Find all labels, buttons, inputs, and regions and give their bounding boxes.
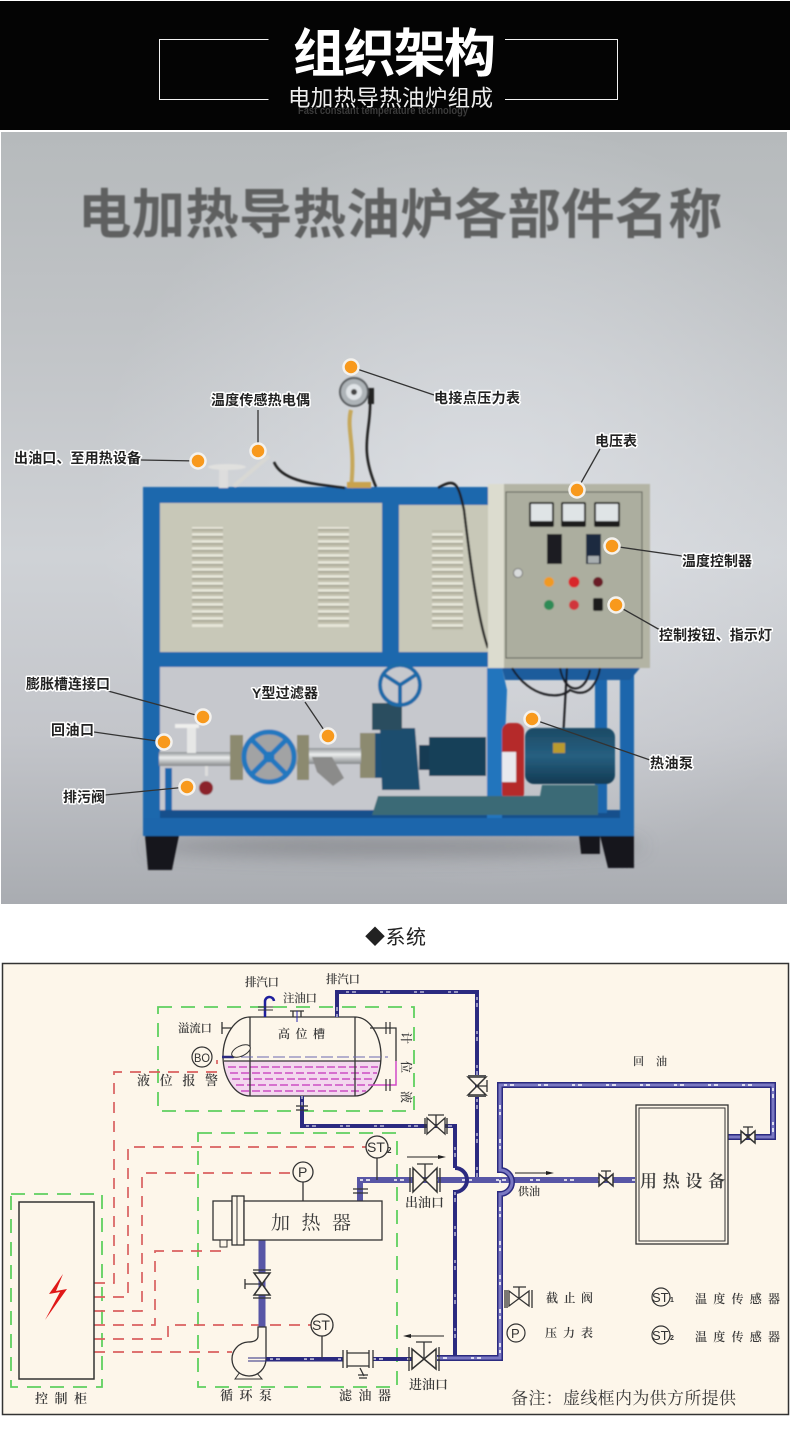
pipe: vent line xyxy=(337,992,477,1180)
callout: outlet: 出油口、至用热设备 xyxy=(14,450,141,466)
callout: oil return: 回油口 xyxy=(51,722,94,738)
circulation pump xyxy=(220,1327,343,1403)
filler port xyxy=(290,1011,304,1017)
subtitle: 电加热导热油炉组成 xyxy=(288,86,493,111)
level gauge label: 液 xyxy=(399,1091,414,1103)
callout: oil pump xyxy=(524,712,693,771)
panel: machine photo xyxy=(1,132,787,904)
level gauge xyxy=(370,1028,396,1061)
header frame lines xyxy=(160,40,618,100)
callout: voltmeter: 电压表 xyxy=(595,433,637,449)
outlet flange xyxy=(208,464,246,488)
heat-using equipment xyxy=(636,1105,728,1244)
valve: gas line xyxy=(468,1076,487,1096)
header band xyxy=(0,1,790,130)
overflow port xyxy=(222,1022,232,1034)
legend xyxy=(505,1287,780,1344)
control cabinet xyxy=(488,484,650,668)
faint English subtitle: Fast constant temperature technology xyxy=(298,105,469,117)
callout: temperature controller xyxy=(604,538,752,569)
alarm label: 液位报警 xyxy=(137,1073,218,1088)
drain valve xyxy=(199,781,213,795)
legend: pressure gauge xyxy=(507,1324,593,1342)
legend: ST1: ST xyxy=(652,1290,669,1305)
pressure gauge P: P xyxy=(298,1164,307,1180)
legend: ST1: 1 xyxy=(670,1297,674,1304)
legend: pressure gauge: P xyxy=(511,1326,520,1341)
temperature sensor ST1: ST xyxy=(312,1317,330,1333)
dashed boundary: heater group xyxy=(198,1133,397,1387)
label: supply oil: 供油 xyxy=(518,1184,540,1198)
valve: tank drain xyxy=(425,1115,447,1134)
header tank: 排汽口 xyxy=(326,972,360,986)
temperature sensor ST2: ST xyxy=(367,1139,385,1155)
callout: drain valve xyxy=(63,780,194,805)
equipment label: 用热设备 xyxy=(640,1172,725,1191)
boiler machine xyxy=(143,378,650,870)
note: 备注：虚线框内为供方所提供 xyxy=(511,1388,737,1408)
pump label: 循环泵 xyxy=(220,1388,272,1403)
callout: thermocouple xyxy=(211,392,310,458)
side panels xyxy=(160,503,382,652)
motor xyxy=(525,728,615,784)
level alarm xyxy=(192,1047,212,1067)
pump handwheel xyxy=(380,665,420,705)
red signal lines xyxy=(94,1060,366,1352)
pipe: return bypass with hop xyxy=(455,1168,467,1358)
pipe: tank drain xyxy=(296,1096,455,1168)
valve: return xyxy=(741,1127,755,1143)
callout: drain valve: 排污阀 xyxy=(63,789,105,805)
tank label: 高位槽 xyxy=(278,1026,325,1041)
header tank: 排汽口 xyxy=(245,975,279,989)
pump base xyxy=(372,785,598,815)
oil filter xyxy=(339,1350,391,1403)
legend: ST1 xyxy=(652,1288,780,1306)
callout: oil pump: 热油泵 xyxy=(650,755,693,771)
legend: pressure gauge: 压力表 xyxy=(545,1325,593,1340)
level gauge label xyxy=(399,1032,414,1103)
callout: voltmeter xyxy=(570,433,637,498)
level gauge label: 计 xyxy=(399,1032,414,1044)
pipe: pump suction xyxy=(248,1357,412,1361)
gate valve body xyxy=(242,733,298,781)
main valve flanges xyxy=(230,733,375,780)
panel: system diagram xyxy=(2,964,788,1414)
float xyxy=(222,1050,245,1057)
temperature sensor ST1 xyxy=(311,1314,333,1359)
flow arrows xyxy=(403,1155,554,1338)
top cable xyxy=(274,462,488,648)
control buttons xyxy=(544,600,554,610)
pressure gauge xyxy=(340,378,376,488)
callout: oil return xyxy=(51,722,172,750)
label: return oil: 回油 xyxy=(633,1054,667,1068)
callout: control buttons: 控制按钮、指示灯 xyxy=(659,627,772,643)
temperature sensor ST2: 2 xyxy=(387,1146,392,1155)
legend: ST1: 温度传感器 xyxy=(695,1291,780,1306)
liquid fill xyxy=(224,1061,381,1096)
indicator lights xyxy=(544,577,554,587)
thermocouple xyxy=(234,456,269,486)
label: inlet port: 进油口 xyxy=(409,1377,448,1392)
system heading: ◆系统 xyxy=(365,926,426,949)
key switch xyxy=(514,568,522,578)
wiring under cabinet xyxy=(512,668,600,775)
level gauge label: 位 xyxy=(399,1061,414,1073)
callout: pressure gauge xyxy=(344,360,520,406)
callout: temperature controller: 温度控制器 xyxy=(682,553,752,569)
feet xyxy=(145,836,634,870)
control cabinet xyxy=(19,1202,94,1406)
photo heading: 电加热导热油炉各部件名称 xyxy=(78,186,722,245)
pressure gauge P xyxy=(293,1162,313,1201)
tank shell xyxy=(223,1017,381,1096)
callout: Y strainer xyxy=(252,685,336,744)
heater xyxy=(213,1189,382,1247)
legend: ST2: 温度传感器 xyxy=(695,1329,780,1344)
header tank: BO xyxy=(194,1051,210,1065)
temperature controllers xyxy=(547,534,562,564)
callout: thermocouple: 温度传感热电偶 xyxy=(211,392,310,408)
callout: control buttons xyxy=(608,598,772,643)
pipe: pump discharge xyxy=(258,1240,266,1327)
label: outlet port: 出油口 xyxy=(405,1195,444,1210)
callout: expansion tank port: 膨胀槽连接口 xyxy=(26,676,110,692)
oil return manifold xyxy=(159,724,232,795)
Y strainer xyxy=(309,748,361,786)
callout: pressure gauge: 电接点压力表 xyxy=(434,390,520,406)
main title: 组织架构 xyxy=(293,26,496,84)
dashed boundary: tank xyxy=(158,1007,414,1111)
callout: Y strainer: Y型过滤器 xyxy=(252,685,318,701)
valve: pump discharge xyxy=(245,1270,271,1298)
dashed boundary: control cabinet xyxy=(11,1194,102,1387)
blue frame xyxy=(143,487,490,818)
filter label: 滤油器 xyxy=(339,1388,391,1403)
legend: ST2: ST xyxy=(652,1328,669,1343)
valve: supply xyxy=(599,1171,613,1186)
temperature sensor ST2 xyxy=(366,1136,392,1180)
legend: stop valve: 截止阀 xyxy=(546,1290,593,1305)
legend: ST2: 2 xyxy=(670,1335,674,1342)
header tank xyxy=(137,972,414,1103)
legend: stop valve xyxy=(505,1287,593,1308)
pipe: return line xyxy=(437,1085,773,1358)
pump head xyxy=(372,703,486,790)
valve: inlet xyxy=(409,1342,439,1371)
louvers xyxy=(192,527,223,627)
heater label: 加热器 xyxy=(271,1212,351,1234)
cabinet label: 控制柜 xyxy=(35,1391,87,1406)
lightning symbol xyxy=(45,1274,67,1320)
callout: expansion tank port xyxy=(26,676,210,724)
voltmeters xyxy=(529,502,620,527)
valve: outlet xyxy=(410,1164,440,1192)
callout: outlet xyxy=(14,450,206,468)
pipe: supply line xyxy=(360,1180,635,1201)
header tank: 溢流口 xyxy=(178,1021,212,1035)
vent with hook xyxy=(265,997,274,1017)
handwheel xyxy=(244,732,294,782)
red coupling guard xyxy=(502,723,524,801)
header tank: 注油口 xyxy=(283,991,317,1005)
legend: ST2 xyxy=(652,1326,780,1344)
floor shadow xyxy=(145,835,645,857)
